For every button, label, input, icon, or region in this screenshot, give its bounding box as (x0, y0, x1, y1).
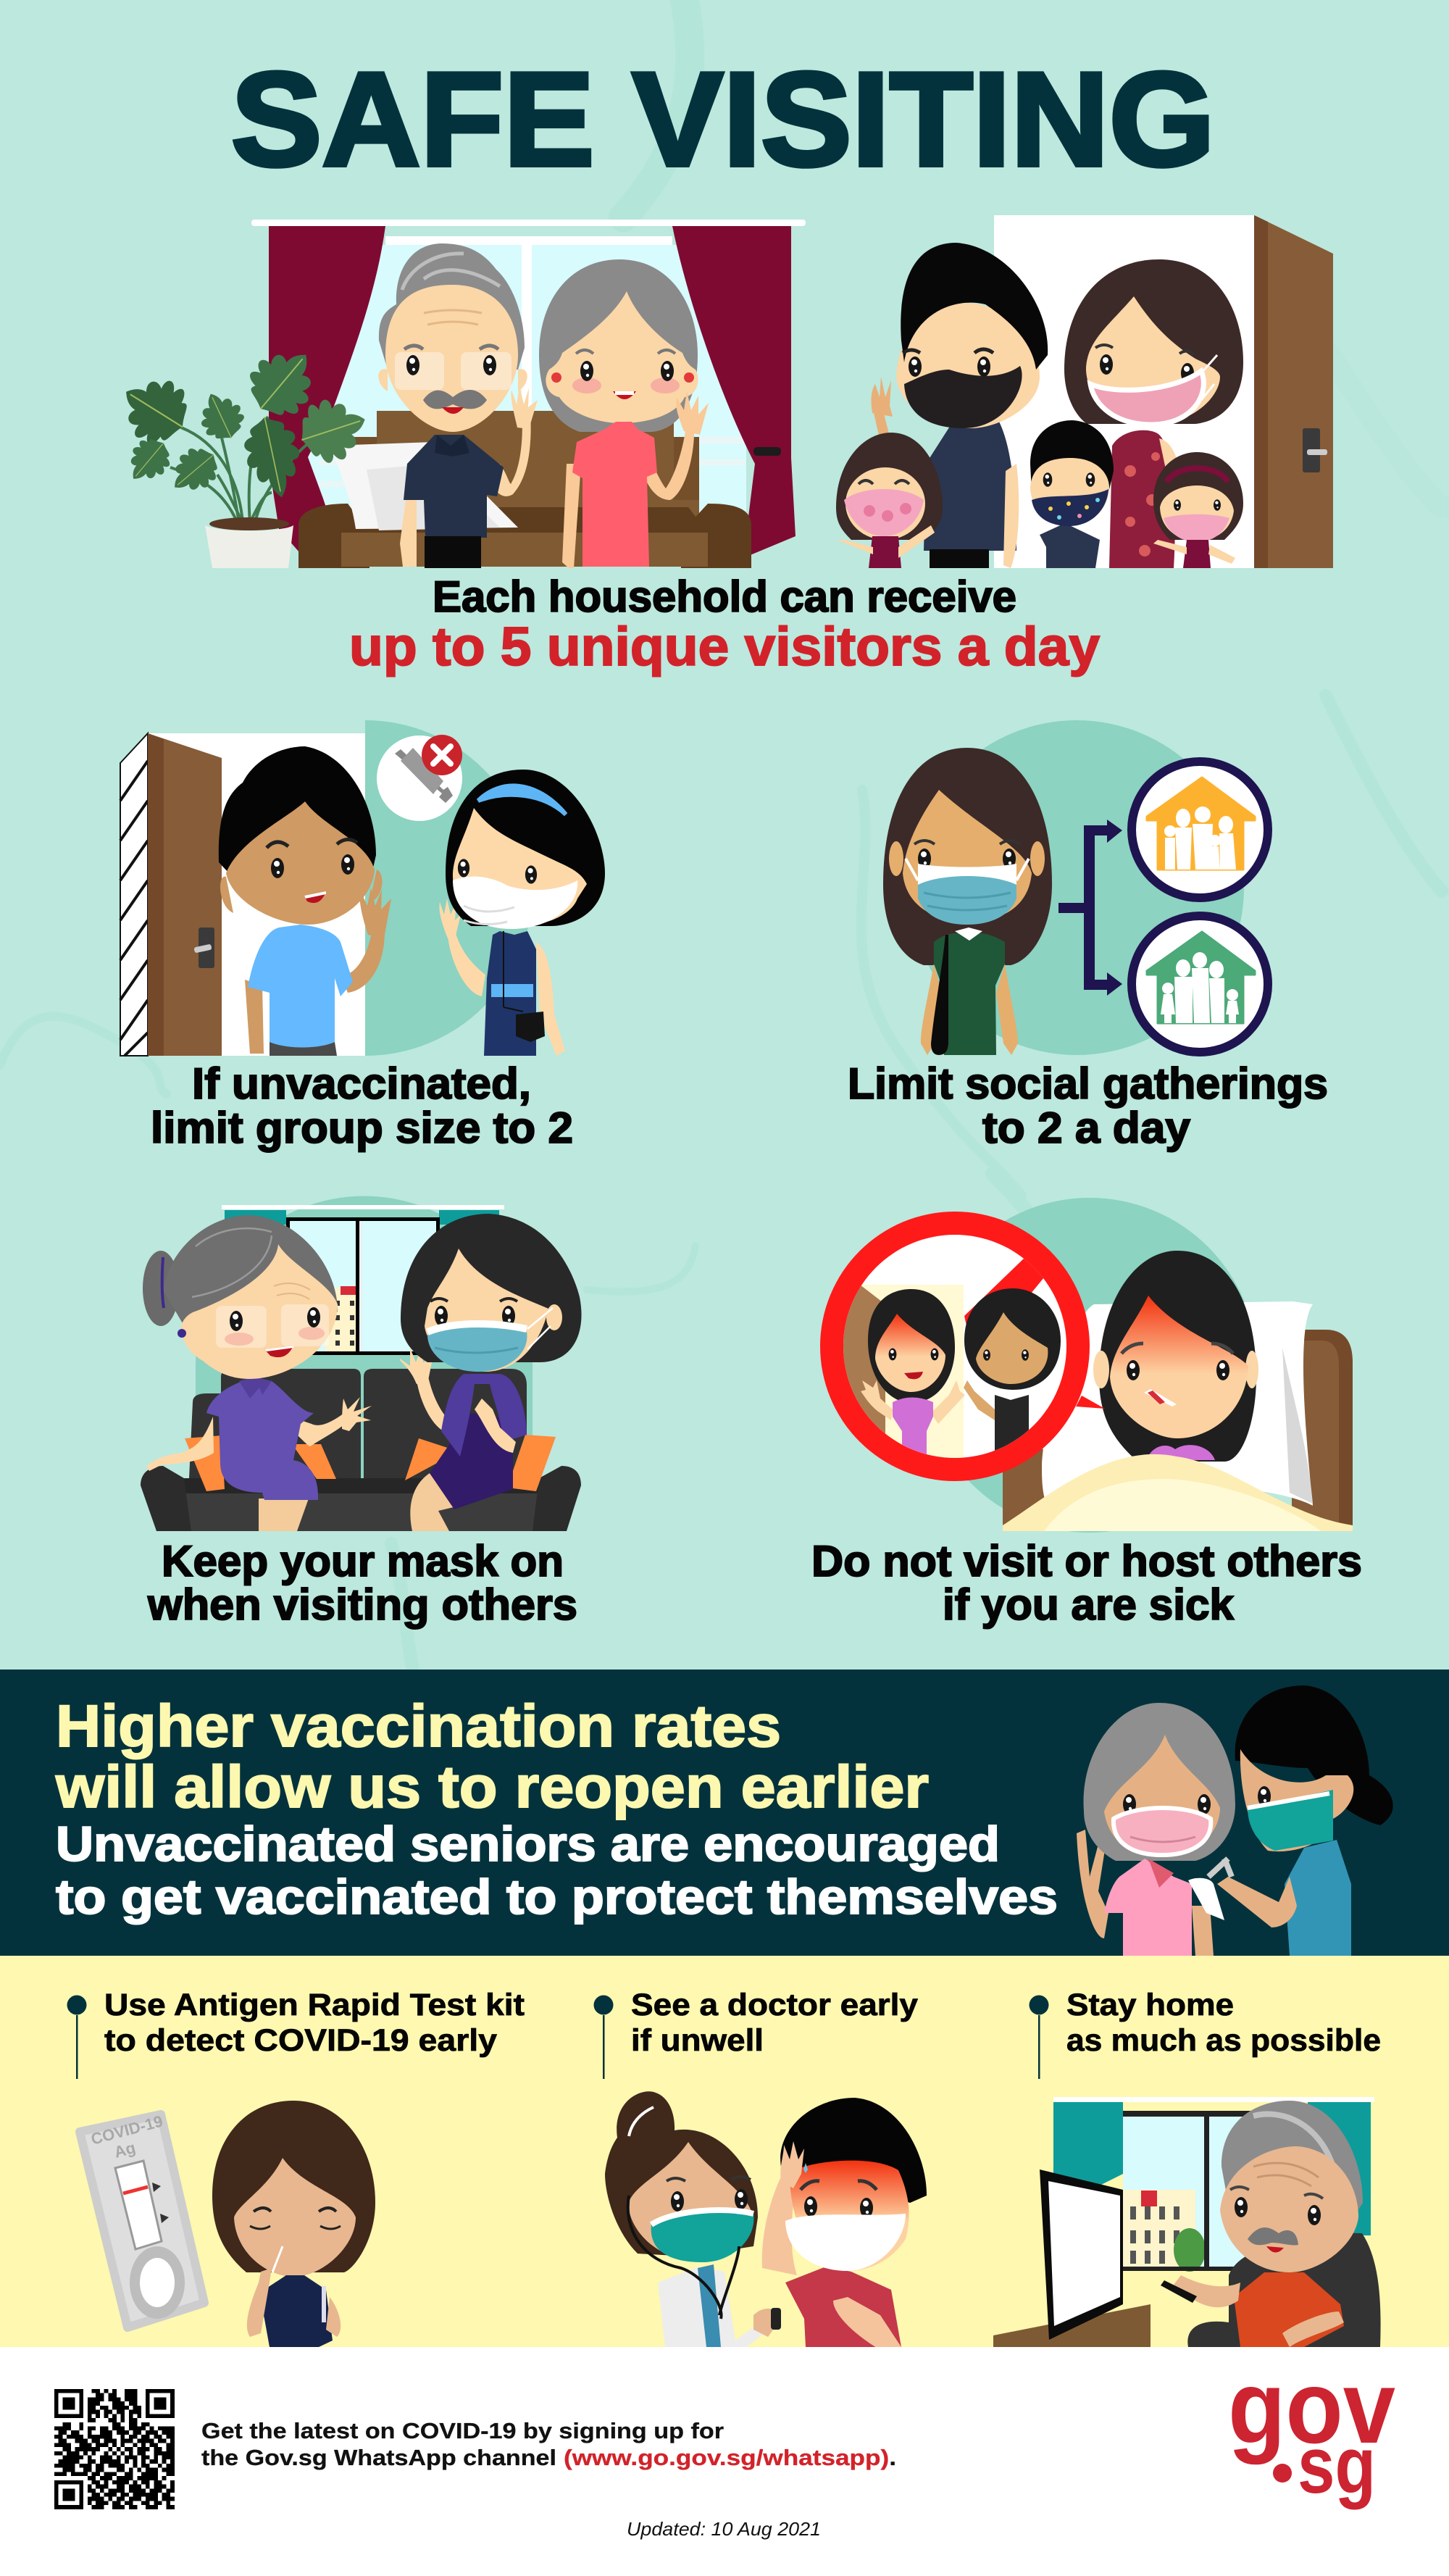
advice: stay home: as much as possible (1066, 2023, 1381, 2058)
son (1030, 420, 1114, 568)
illustration: vaccinated senior (1077, 1703, 1235, 1956)
illustration: unwell patient (762, 2098, 927, 2348)
panel: footer (0, 2347, 1449, 2576)
background: watercolour streaks (0, 0, 1442, 1670)
man waving (219, 746, 391, 1056)
illustration: keep mask on when visiting (141, 1196, 582, 1531)
icon: green household (1132, 916, 1268, 1052)
text: whatsapp sign-up: the Gov.sg WhatsApp channel (201, 2445, 556, 2470)
icon: no vaccination (377, 735, 462, 821)
logo: gov.sg: sg (1298, 2421, 1376, 2510)
woman with fever (868, 1289, 955, 1403)
caption: unvaccinated (151, 1059, 573, 1152)
text: household visitor limit: Each household can receive (433, 572, 1016, 621)
illustration: limit social gatherings (883, 720, 1268, 1055)
table and television (993, 2169, 1151, 2347)
title: SAFE VISITING (231, 44, 1215, 193)
caption: social gatherings: Limit social gatherings (848, 1059, 1328, 1108)
caption: do not visit: if you are sick (943, 1580, 1235, 1629)
background: mint panel (0, 0, 1449, 1670)
text: updated date: Updated: 10 Aug 2021 (627, 2518, 821, 2540)
caption: keep mask on (147, 1537, 577, 1629)
caption: keep mask on: when visiting others (147, 1580, 577, 1629)
text: household visitor limit: up to 5 unique visitors a day (349, 616, 1100, 677)
window (1053, 2097, 1374, 2272)
caption: keep mask on: Keep your mask on (162, 1537, 564, 1585)
advice: stay home (1029, 1988, 1381, 2079)
illustration: woman swabbing nose (212, 2101, 375, 2347)
bed (1003, 1301, 1353, 1531)
caption: social gatherings (848, 1059, 1328, 1152)
text: unvaccinated seniors: to get vaccinated to protect themselves (56, 1870, 1058, 1925)
sick woman (1093, 1251, 1258, 1462)
visitor (964, 1288, 1061, 1390)
illustration: antigen test kit: Ag (112, 2138, 138, 2162)
advice: antigen rapid test (67, 1988, 525, 2079)
advice: see a doctor: See a doctor early (631, 1988, 918, 2022)
text: unvaccinated seniors (56, 1817, 1058, 1925)
father (896, 243, 1048, 568)
heading: higher vaccination rates: will allow us to reopen earlier (55, 1754, 929, 1820)
illustration: unvaccinated group size (120, 720, 605, 1056)
black sofa (141, 1369, 581, 1531)
illustration: nurse (1217, 1685, 1393, 1956)
text: whatsapp sign-up: Get the latest on COVID-19 by signing up for (201, 2418, 724, 2443)
caption: unvaccinated: limit group size to 2 (151, 1104, 573, 1152)
mother (1064, 259, 1243, 568)
grandmother (539, 259, 709, 568)
daughter (836, 377, 943, 568)
advice: stay home: Stay home (1066, 1988, 1234, 2022)
door (1254, 215, 1333, 568)
advice: see a doctor: if unwell (631, 2023, 764, 2058)
logo: gov.sg (1228, 2350, 1395, 2510)
blanket (1003, 1454, 1353, 1531)
caption: do not visit: Do not visit or host others (811, 1537, 1362, 1585)
heading: higher vaccination rates: Higher vaccination rates (56, 1693, 781, 1759)
caption: social gatherings: to 2 a day (982, 1104, 1191, 1152)
woman in mask waving (439, 770, 605, 1056)
grandmother (143, 1215, 372, 1531)
visitor in mask (400, 1214, 582, 1531)
logo: gov.sg: . (1277, 2449, 1287, 2490)
text: unvaccinated seniors: Unvaccinated seniors are encouraged (56, 1817, 1000, 1872)
icon: orange household (1132, 762, 1268, 898)
illustration: senior at home (993, 2097, 1381, 2347)
illustration: antigen test kit: COVID-19 (89, 2112, 164, 2148)
grandfather (378, 243, 538, 568)
caption: do not visit (811, 1537, 1362, 1629)
panel: advice strip (0, 1956, 1449, 2347)
panel: vaccination band (0, 1670, 1449, 1956)
advice: see a doctor (594, 1988, 918, 2079)
advice: antigen rapid test: to detect COVID-19 early (104, 2023, 497, 2058)
senior man with remote (1161, 2101, 1363, 2347)
illustration: antigen test kit (80, 2112, 204, 2327)
illustration: visiting family at the door (836, 215, 1333, 568)
text: whatsapp sign-up (201, 2418, 896, 2470)
caption: unvaccinated: If unvaccinated, (192, 1059, 531, 1108)
illustration: grandparents in living room (109, 220, 806, 568)
heading: higher vaccination rates (55, 1693, 929, 1820)
logo: gov.sg: gov (1228, 2350, 1395, 2465)
woman with bag (883, 748, 1052, 1055)
illustration: doctor (605, 2091, 781, 2347)
prohibition bubble (820, 1212, 1105, 1481)
window and rod (222, 1205, 504, 1355)
text: whatsapp sign-up: (www.go.gov.sg/whatsapp) . (564, 2445, 896, 2470)
illustration: do not visit if sick (820, 1198, 1353, 1533)
younger daughter (1153, 452, 1243, 568)
text: household visitor limit (349, 572, 1100, 677)
door with hatching (120, 733, 222, 1056)
plant (109, 335, 375, 568)
QR code (54, 2389, 175, 2509)
advice: antigen rapid test: Use Antigen Rapid Test kit (104, 1988, 525, 2022)
arrows: branching connector (1058, 820, 1122, 996)
